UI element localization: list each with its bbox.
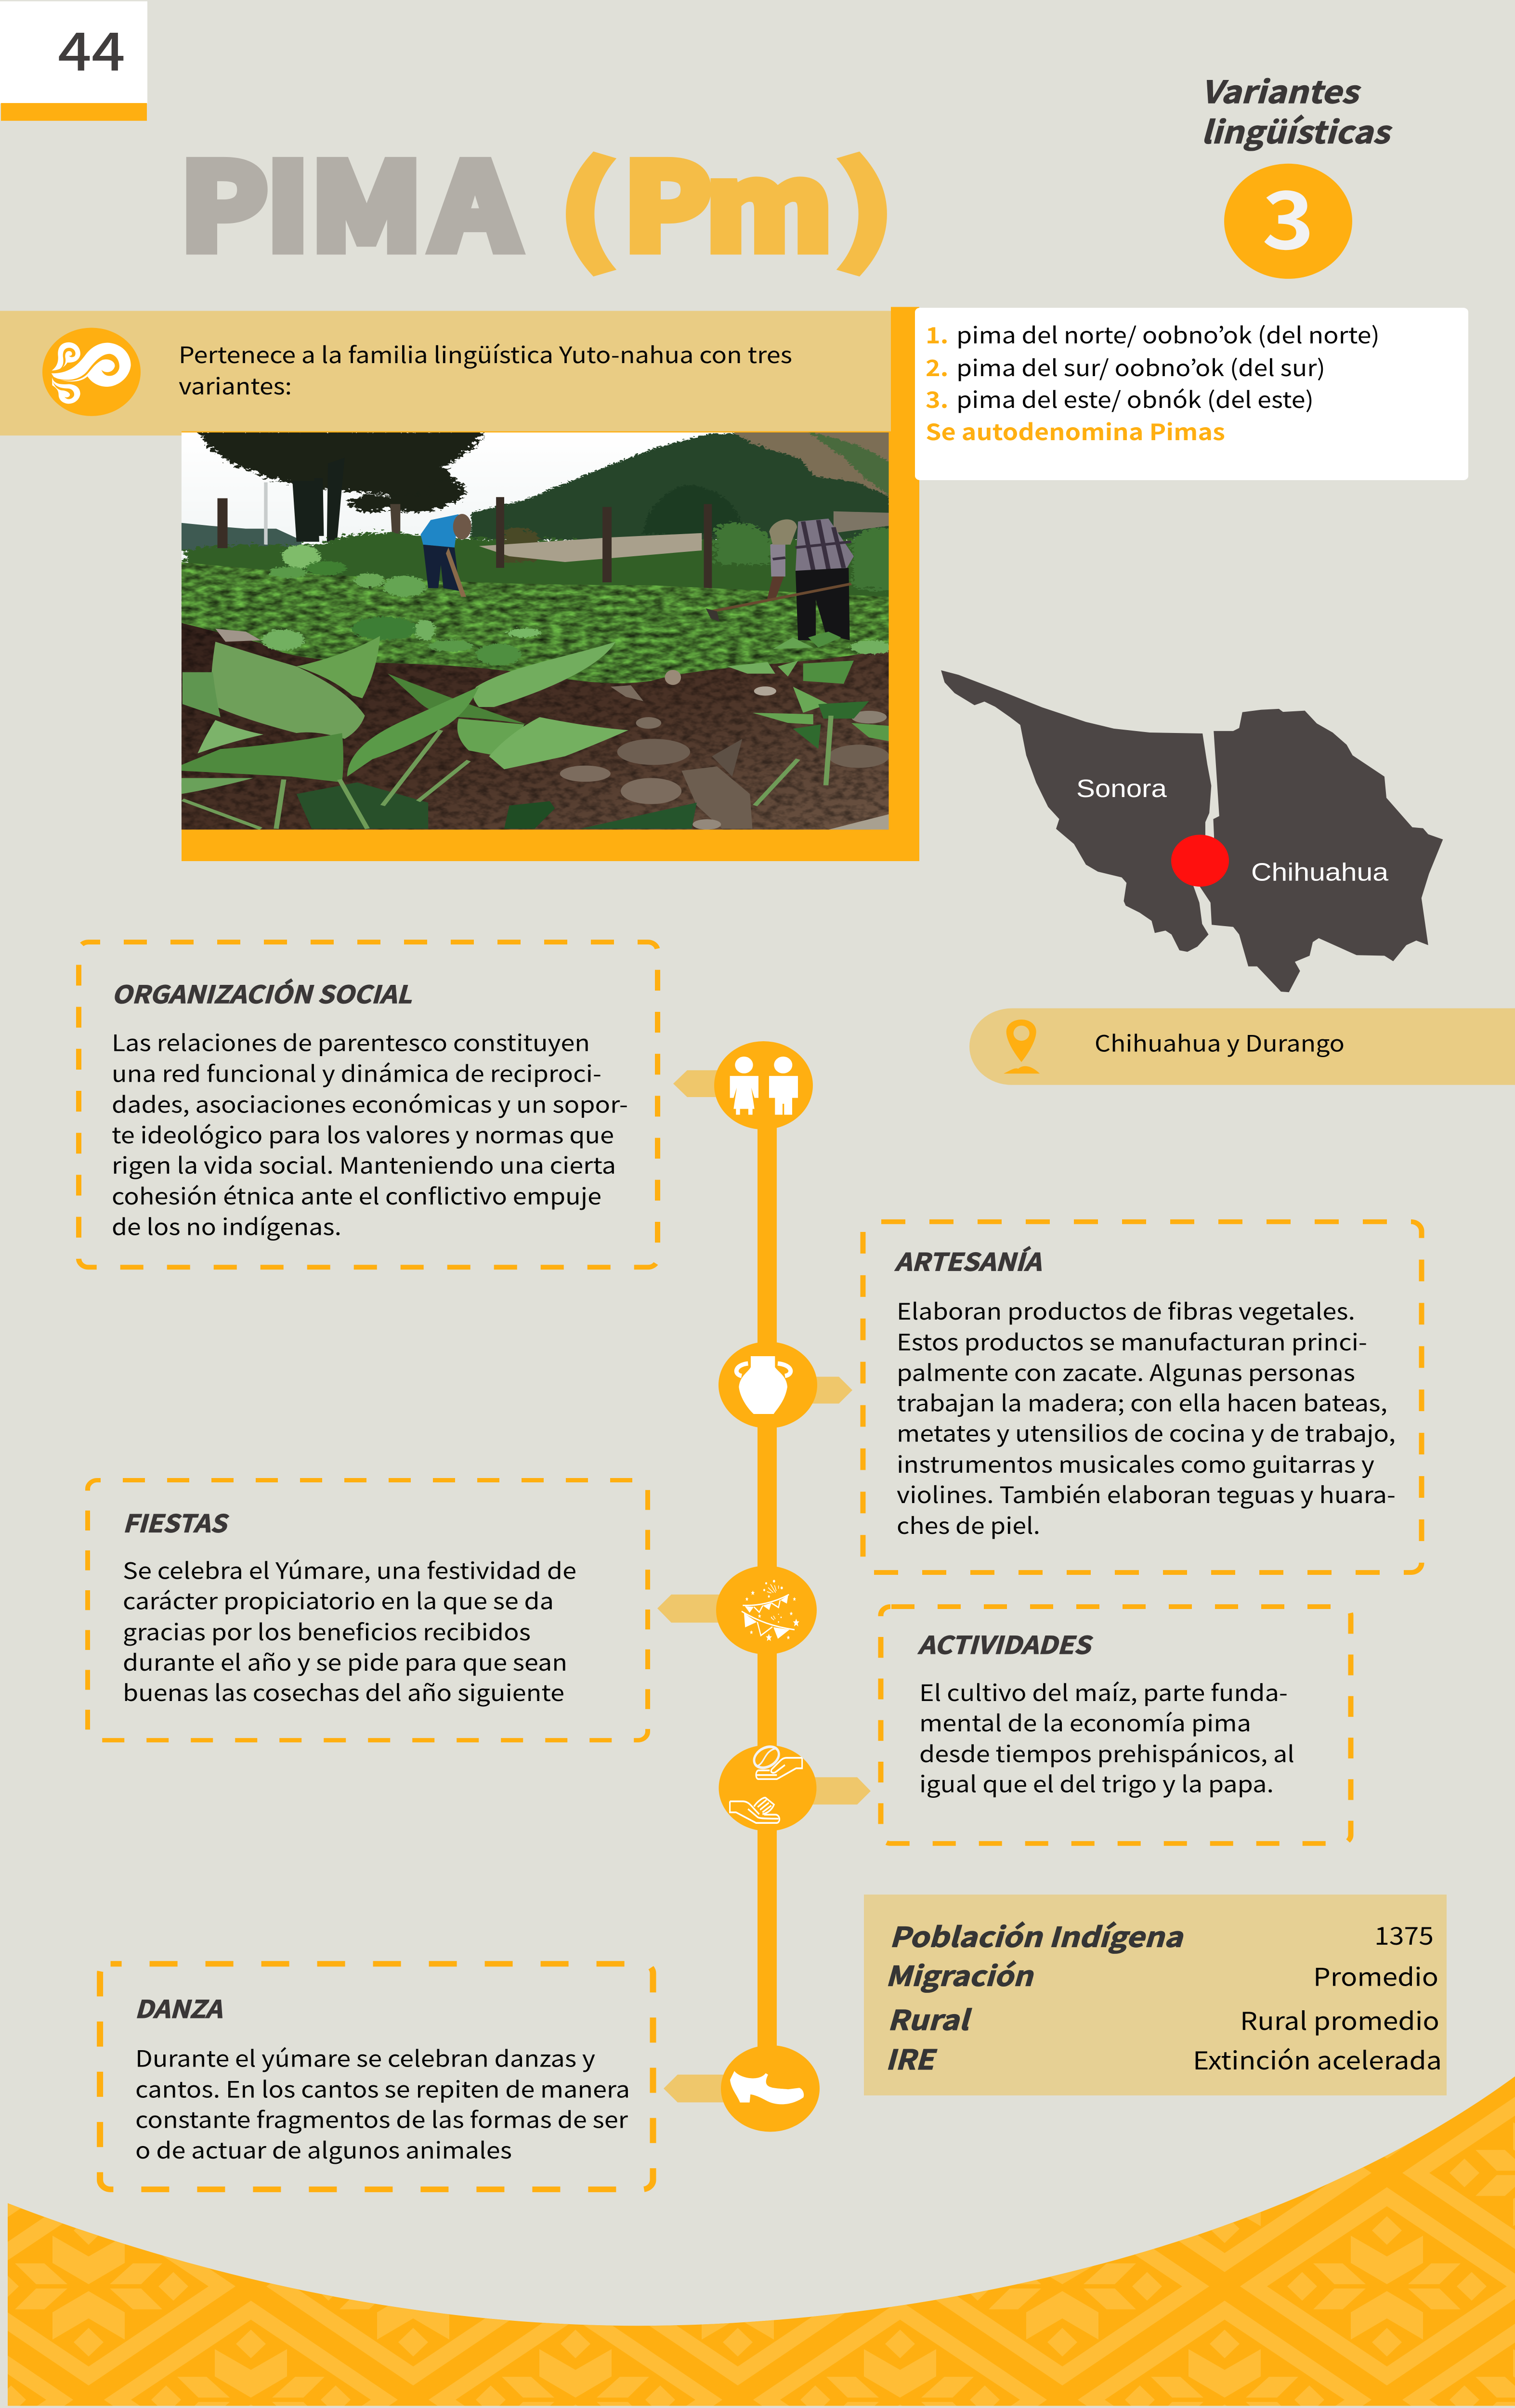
arrow: actividades <box>809 1777 871 1805</box>
body text <box>897 1294 1396 1541</box>
panel: statistics <box>864 1895 1447 2095</box>
self-designation: Se autodenomina Pimas <box>926 415 1225 447</box>
body text <box>919 1675 1294 1799</box>
body text: constante fragmentos de las formas de ser <box>135 2102 628 2135</box>
heading: ORGANIZACIÓN SOCIAL <box>112 975 412 1010</box>
photo: people working a bean field <box>182 429 894 830</box>
family text: Pertenece a la familia lingüística Yuto-nahua con tres <box>179 338 792 370</box>
arrow: fiestas <box>657 1595 722 1623</box>
row: migración: Promedio <box>1313 1957 1438 1993</box>
body text: de los no indígenas. <box>112 1210 341 1242</box>
panel: danza <box>100 1964 653 2189</box>
soil <box>182 614 889 830</box>
label Sonora: Sonora <box>1076 774 1167 802</box>
person plaid <box>706 519 854 641</box>
noise texture <box>182 608 889 830</box>
title <box>180 113 897 284</box>
family text <box>179 338 792 401</box>
row: rural: Rural <box>888 1999 972 2038</box>
row: IRE: Extinción acelerada <box>1193 2041 1442 2077</box>
row: población indígena: 1375 <box>1374 1916 1434 1952</box>
heading: ARTESANÍA <box>894 1243 1042 1278</box>
row: población indígena: Población Indígena <box>889 1916 1184 1955</box>
body text: dades, asociaciones económicas y un sopor- <box>112 1087 628 1120</box>
variants count badge: 3 <box>1262 157 1314 272</box>
body text: o de actuar de algunos animales <box>135 2133 512 2165</box>
body text <box>135 2042 630 2165</box>
fence posts <box>218 497 712 591</box>
arrow: danza <box>664 2075 727 2102</box>
location text: Chihuahua y Durango <box>1095 1026 1345 1059</box>
body text: buenas las cosechas del año siguiente <box>123 1675 564 1708</box>
body text: rigen la vida social. Manteniendo una cierta <box>112 1148 616 1180</box>
body text: cantos. En los cantos se repiten de manera <box>135 2072 630 2105</box>
big leaves <box>210 642 365 739</box>
bushes <box>182 521 894 620</box>
heading: FIESTAS <box>123 1505 229 1540</box>
timeline bar <box>758 1086 777 2081</box>
language family band <box>0 311 891 435</box>
panel: organización social <box>79 942 658 1267</box>
small leaves <box>260 544 889 665</box>
panel: actividades <box>881 1607 1351 1844</box>
variantes lingüísticas heading <box>1201 68 1393 152</box>
body text: durante el año y se pide para que sean <box>123 1645 567 1677</box>
red location marker <box>1171 835 1229 887</box>
title: PIMA <box>180 113 519 284</box>
page number tab <box>0 1 147 121</box>
page number: 44 <box>58 10 125 86</box>
body text: Durante el yúmare se celebran danzas y <box>135 2042 595 2074</box>
variantes lingüísticas heading: Variantes <box>1201 68 1361 112</box>
arrow: artesanía <box>809 1377 852 1403</box>
title: ( <box>556 118 619 283</box>
node: party flags icon <box>716 1566 817 1654</box>
title: Pm <box>624 113 832 284</box>
row: rural <box>888 1999 1439 2038</box>
body text: metates y utensilios de cocina y de trabajo, <box>897 1416 1396 1449</box>
Sonora shape <box>941 670 1211 952</box>
body text <box>112 1026 628 1242</box>
variantes lingüísticas heading: lingüísticas <box>1201 108 1393 152</box>
body text: cohesión étnica ante el conflictivo empuje <box>112 1179 601 1211</box>
body text: igual que el del trigo y la papa. <box>919 1767 1274 1799</box>
row: rural: Rural promedio <box>1240 2002 1439 2037</box>
body text: violines. También elaboran teguas y huara- <box>897 1478 1396 1510</box>
heading: ACTIVIDADES <box>917 1626 1093 1661</box>
body text: palmente con zacate. Algunas personas <box>897 1356 1355 1388</box>
variant 2: pima del sur/ oobno’ok (del sur) <box>956 351 1325 383</box>
node: vase icon <box>718 1342 817 1428</box>
node: shoe icon <box>721 2045 820 2132</box>
row: población indígena <box>889 1916 1434 1955</box>
variants count badge <box>1224 157 1352 279</box>
body text: mental de la economía pima <box>919 1706 1251 1738</box>
family text: variantes: <box>179 369 292 401</box>
row: migración: Migración <box>886 1955 1034 1994</box>
row: migración <box>886 1955 1438 1994</box>
node: people icon <box>714 1041 813 1129</box>
body text: instrumentos musicales como guitarras y <box>897 1447 1374 1479</box>
variant 1: 1. <box>926 318 949 350</box>
title: ) <box>834 118 897 283</box>
location pill <box>969 1008 1515 1085</box>
body text: carácter propiciatorio en la que se da <box>123 1584 554 1616</box>
map: Sonora and Chihuahua <box>941 670 1443 992</box>
body text: Estos productos se manufacturan princi- <box>897 1325 1367 1357</box>
tree <box>195 429 479 510</box>
variant 3: 3. <box>926 382 949 415</box>
variant 2: 2. <box>926 351 949 383</box>
body text <box>123 1554 576 1708</box>
icon: location pin <box>1004 1020 1040 1073</box>
row: IRE <box>886 2039 1442 2078</box>
panel: fiestas <box>88 1480 648 1740</box>
variant 1: pima del norte/ oobno’ok (del norte) <box>956 318 1380 350</box>
body text: gracias por los beneficios recibidos <box>123 1615 531 1647</box>
panel: artesanía <box>863 1222 1422 1572</box>
heading: DANZA <box>135 1990 222 2025</box>
variant 3: pima del este/ obnók (del este) <box>956 382 1314 415</box>
node: hands with seeds icon <box>718 1743 817 1831</box>
arrow: organización <box>673 1070 722 1097</box>
field mid <box>182 562 889 683</box>
bottom patterned band <box>8 2076 1515 2406</box>
stones <box>215 628 889 830</box>
body text: te ideológico para los valores y normas que <box>112 1118 614 1150</box>
row: IRE: IRE <box>886 2039 937 2078</box>
icon: swirl <box>42 328 141 416</box>
body text: Las relaciones de parentesco constituyen <box>112 1026 590 1058</box>
body text: trabajan la madera; con ella hacen bateas, <box>897 1386 1387 1418</box>
body text: Se celebra el Yúmare, una festividad de <box>123 1554 576 1586</box>
body text: El cultivo del maíz, parte funda- <box>919 1675 1288 1708</box>
Chihuahua shape <box>1200 709 1443 992</box>
body text: una red funcional y dinámica de reciproci- <box>112 1057 601 1089</box>
body text: desde tiempos prehispánicos, al <box>919 1737 1294 1769</box>
body text: ches de piel. <box>897 1508 1040 1541</box>
stems <box>183 716 831 829</box>
person blue <box>420 514 471 597</box>
panel: variants list <box>915 308 1468 480</box>
photo frame orange <box>182 307 919 861</box>
label Chihuahua: Chihuahua <box>1251 858 1388 886</box>
body text: Elaboran productos de fibras vegetales. <box>897 1294 1355 1326</box>
